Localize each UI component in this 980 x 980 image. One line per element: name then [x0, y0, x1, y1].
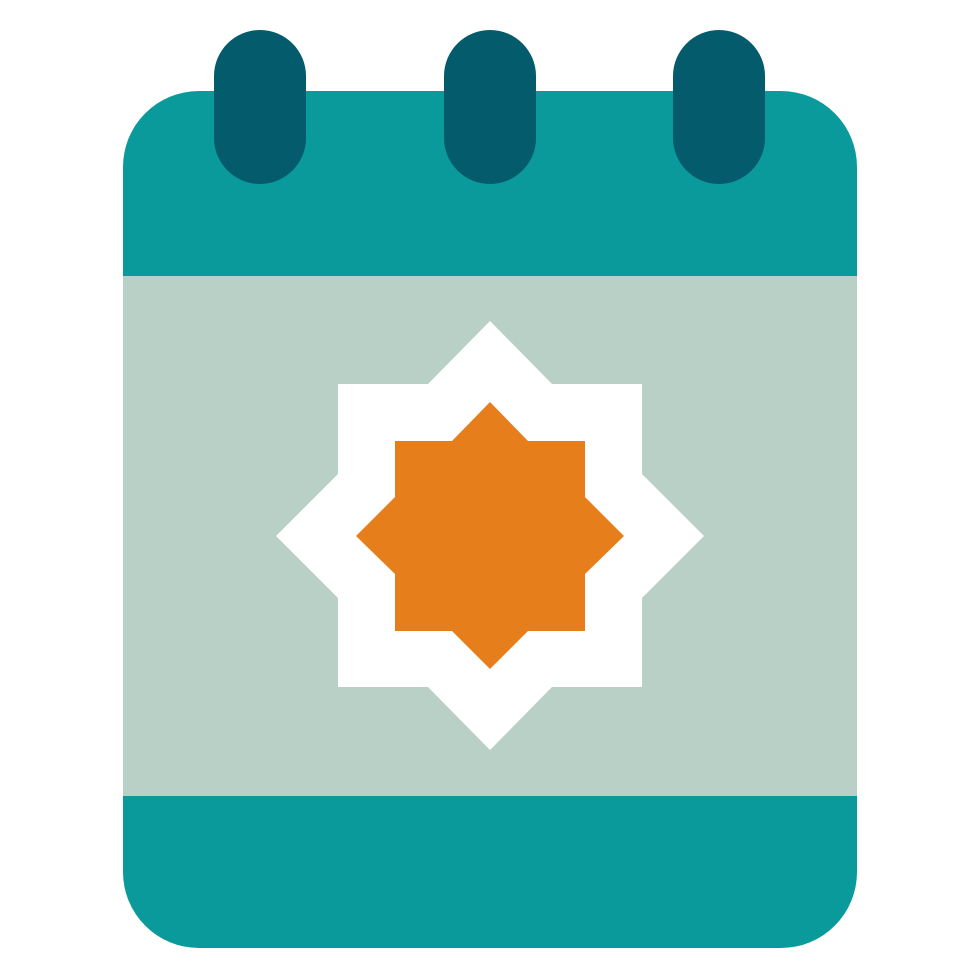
left ring — [214, 30, 306, 184]
calendar top band — [123, 91, 857, 276]
orange eight-pointed star — [356, 402, 624, 669]
binder rings — [214, 30, 765, 184]
white eight-pointed star — [276, 321, 704, 750]
right ring — [673, 30, 765, 184]
calendar bottom band — [123, 796, 857, 948]
calendar body — [123, 91, 857, 948]
middle ring — [444, 30, 536, 184]
calendar middle panel — [123, 276, 857, 796]
